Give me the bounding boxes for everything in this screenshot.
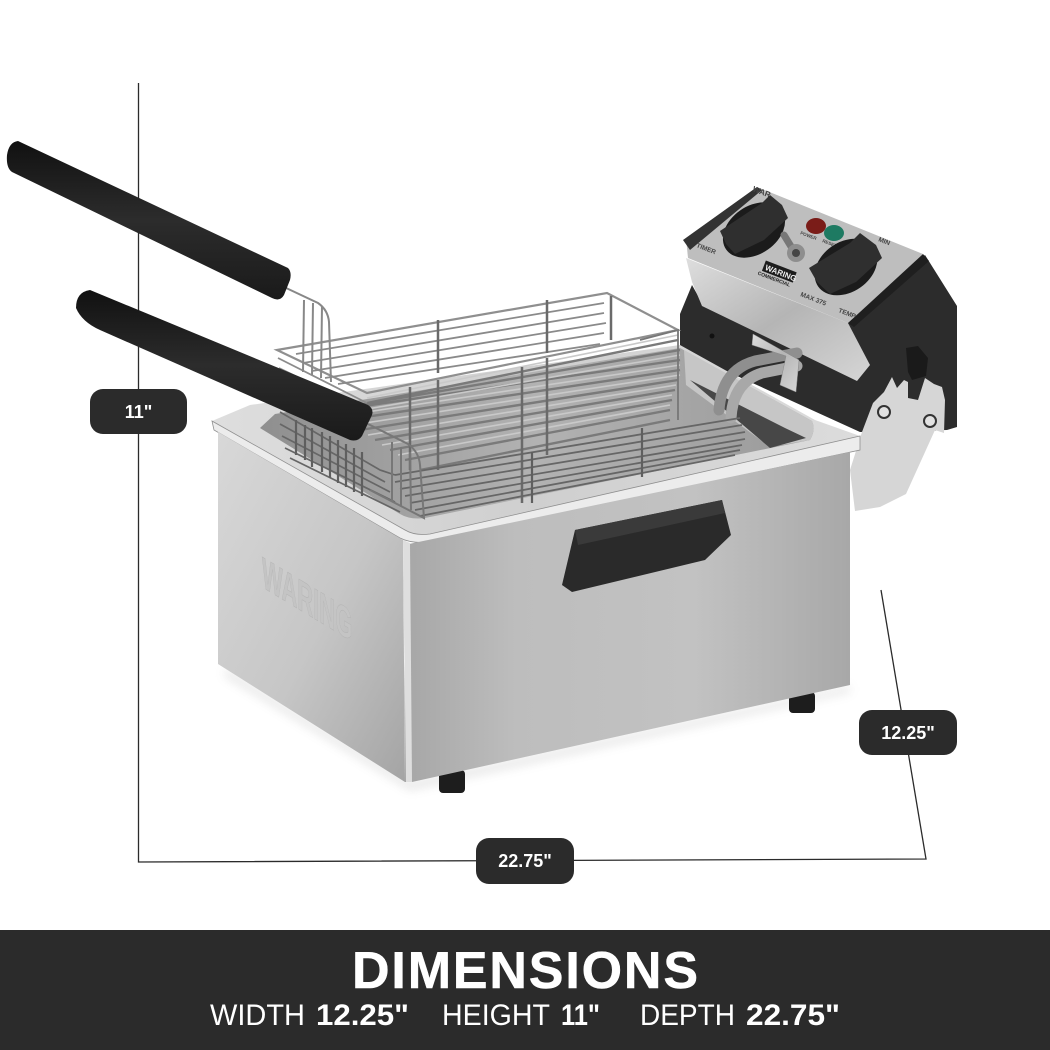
timer and temperature labels [695, 184, 891, 321]
control panel lower plate face [686, 258, 870, 381]
brand badge: WARING [764, 263, 798, 283]
dimensions summary: 11" [561, 999, 600, 1032]
temperature knob [804, 227, 888, 307]
mounting bracket [850, 377, 945, 511]
upper basket handle [7, 141, 291, 299]
toggle switch [784, 235, 805, 262]
heating element tubes [719, 353, 797, 418]
brand badge: COMMERCIAL [757, 271, 791, 289]
dimensions summary: 12.25" [316, 999, 409, 1032]
timer and temperature labels: MIN [877, 236, 891, 247]
timer and temperature labels: MAX 375 [799, 291, 827, 308]
footer banner [0, 930, 1050, 1050]
fryer well [260, 348, 814, 518]
upper handle wire [284, 287, 331, 382]
lower basket handle [76, 290, 372, 440]
lower handle wire [368, 424, 424, 518]
dimension pill: width: 12.25" [881, 723, 935, 743]
dimensions summary: DEPTH [640, 999, 735, 1032]
dimensions summary: 22.75" [746, 999, 840, 1032]
dimensions summary: HEIGHT [442, 999, 550, 1032]
control panel black housing [680, 255, 957, 432]
timer and temperature labels: RESET [822, 238, 838, 248]
rim front lip over basket [212, 421, 860, 542]
rim top surface [212, 345, 860, 542]
floor shadow [225, 668, 850, 790]
front handle [562, 500, 731, 592]
timer knob [712, 191, 796, 269]
front corner highlight [403, 540, 412, 782]
bracket pins [878, 406, 936, 427]
lower basket [280, 412, 745, 516]
timer and temperature labels: TIMER [695, 242, 717, 256]
timer and temperature labels: POWER [800, 230, 818, 241]
element mounting plate [752, 334, 799, 392]
fryer feet [439, 692, 815, 793]
dimension pill: depth [476, 838, 574, 884]
dimension lines [138, 83, 926, 862]
fryer front face [404, 452, 850, 782]
fryer product illustration [7, 141, 957, 793]
dimension pill: width [859, 710, 957, 755]
brand badge [757, 259, 798, 290]
dimensions summary: WIDTH [210, 999, 305, 1032]
timer and temperature labels: TEMP [837, 307, 857, 321]
fryer left face [218, 432, 405, 782]
banner heading: DIMENSIONS [352, 942, 698, 1000]
embossed brand on left face: WARING [262, 548, 352, 652]
control panel top face [683, 184, 929, 327]
indicator lights [806, 218, 844, 241]
dimensions summary [210, 999, 840, 1032]
timer and temperature labels: WAR [751, 184, 772, 200]
dimension pill: height [90, 389, 187, 434]
upper basket [277, 293, 680, 503]
dimension pill: depth: 22.75" [498, 851, 552, 871]
dimension pill: height: 11" [125, 402, 152, 422]
